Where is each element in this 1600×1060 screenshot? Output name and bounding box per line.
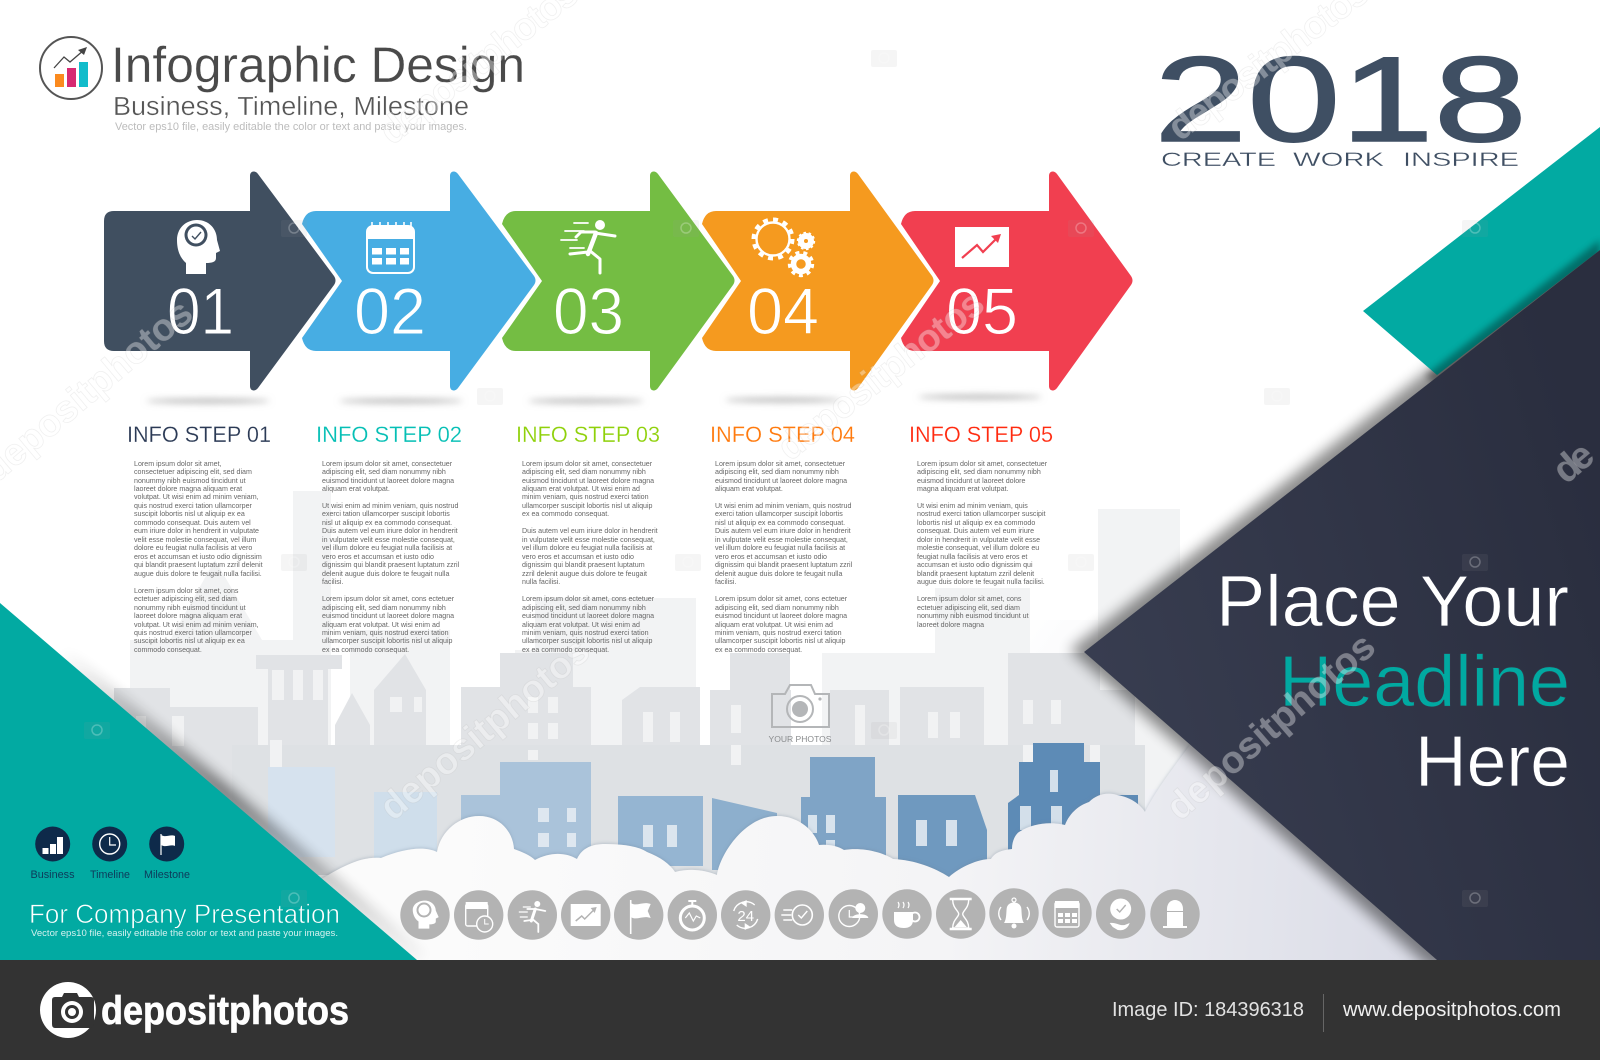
step 4 body text: ex ea commodo consequat. bbox=[715, 646, 802, 654]
step 2 body text: euismod tincidunt ut laoreet dolore magna bbox=[322, 477, 454, 485]
step 2 body text: Duis autem vel eum iriure dolor in hendrerit bbox=[322, 527, 458, 535]
watermarks: depositphotos bbox=[372, 630, 598, 829]
step 3 body text: ex ea commodo consequat. bbox=[522, 510, 609, 518]
step 4 body text: Lorem ipsum dolor sit amet, cons ectetuer bbox=[715, 595, 847, 603]
step 3 body text: Lorem ipsum dolor sit amet, consectetuer bbox=[522, 460, 652, 468]
step 3 body text: ex ea commodo consequat. bbox=[522, 646, 609, 654]
step 4 body text: aliquam erat volutpat. Ut wisi enim ad bbox=[715, 620, 833, 628]
step 2 body text: delenit augue duis dolore te feugait nulla bbox=[322, 570, 449, 578]
step 2 arrow bbox=[302, 172, 536, 390]
step 5 body text: dolor in hendrerit in vulputate velit esse bbox=[917, 536, 1040, 544]
top-right teal band bbox=[1363, 127, 1600, 375]
paper clouds ground bbox=[320, 745, 1440, 960]
title: Infographic Design bbox=[111, 37, 525, 93]
step 4 body text: ullamcorper suscipit lobortis nisl ut aliquip bbox=[715, 637, 846, 645]
step 2 body text: exerci tation ullamcorper suscipit lobortis bbox=[322, 510, 450, 518]
icon: milestone marker bbox=[1150, 889, 1200, 939]
depositphotos logo: depositphotos bbox=[101, 989, 349, 1033]
step 2 body text bbox=[322, 460, 459, 654]
step 3 arrow bbox=[502, 172, 734, 390]
logo icon bbox=[40, 37, 102, 99]
step 5 body text: euismod tincidunt ut laoreet dolore bbox=[917, 477, 1025, 485]
step 4 body text: Ut wisi enim ad minim veniam, quis nostrud bbox=[715, 502, 851, 510]
step 4 body text: vel illum dolore eu feugiat nulla facilisis at bbox=[715, 544, 845, 552]
icon labels: Timeline bbox=[90, 869, 130, 881]
step 4 body text: delenit augue duis dolore te feugait nulla bbox=[715, 570, 842, 578]
step 4 body text: Lorem ipsum dolor sit amet, consectetuer bbox=[715, 460, 845, 468]
icon: bell bbox=[989, 888, 1039, 938]
step 2 body text: aliquam erat volutpat. bbox=[322, 485, 390, 493]
step 3 body text: vero eros et accumsan et iusto odio bbox=[522, 553, 634, 561]
step 5 body text: nonummy nibh euismod tincidunt ut bbox=[917, 612, 1029, 620]
step 3 body text: minim veniam, quis nostrud exerci tation bbox=[522, 629, 649, 637]
icon: chart bbox=[561, 890, 610, 940]
step 3 body text: Duis autem vel eum iriure dolor in hendrerit bbox=[522, 527, 658, 535]
tagline: WORK bbox=[1293, 149, 1384, 171]
step 3 body text: adipiscing elit, sed diam nonummy nibh bbox=[522, 604, 646, 612]
step 4 body text: nisl ut aliquip ex ea commodo consequat. bbox=[715, 519, 845, 527]
icon: coffee cup bbox=[882, 889, 932, 939]
watermarks: depositphotos bbox=[770, 282, 993, 469]
icon: clock person bbox=[829, 889, 878, 939]
step 1 body text: eros et accumsan et iusto odio dignissim bbox=[134, 553, 262, 561]
subtitle: Business, Timeline, Milestone bbox=[113, 93, 469, 121]
icon: runner bbox=[508, 890, 557, 940]
year heading: 2018 bbox=[1154, 31, 1527, 167]
bottom-left teal panel bbox=[0, 603, 417, 960]
step 3 body text: euismod tincidunt ut laoreet dolore magna bbox=[522, 477, 654, 485]
icon: runner bbox=[561, 220, 615, 273]
icon: gears bbox=[754, 220, 814, 276]
tagline: INSPIRE bbox=[1403, 149, 1519, 171]
icon: milestone bbox=[149, 826, 184, 862]
icon: clock in hand bbox=[1096, 889, 1145, 939]
step 5 body text: Lorem ipsum dolor sit amet, consectetuer bbox=[917, 460, 1047, 468]
step 1 body text: quis nostrud exerci tation ullamcorper bbox=[134, 502, 252, 510]
step 4 body text: aliquam erat volutpat. bbox=[715, 485, 783, 493]
icon: stopwatch bbox=[668, 890, 717, 940]
step headings: INFO STEP 05 bbox=[909, 422, 1053, 447]
city windows bbox=[136, 670, 1100, 775]
dark panel shadow bbox=[1070, 236, 1600, 968]
step 2 body text: ex ea commodo consequat. bbox=[322, 646, 409, 654]
step 1 body text: suscipit lobortis nisl ut aliquip ex ea bbox=[134, 637, 245, 645]
step 1 body text: nonummy nibh euismod tincidunt ut bbox=[134, 604, 246, 612]
step 5 body text: Ut wisi enim ad minim veniam, quis bbox=[917, 502, 1028, 510]
step 2 body text: euismod tincidunt ut laoreet dolore magna bbox=[322, 612, 454, 620]
step 2 body text: adipiscing elit, sed diam nonummy nibh bbox=[322, 604, 446, 612]
icon row bbox=[400, 888, 1200, 940]
step 1 body text: Lorem ipsum dolor sit amet, cons bbox=[134, 587, 238, 595]
blue building windows bbox=[538, 770, 1062, 854]
step 5 body text: nostrud exerci tation ullamcorper suscipit bbox=[917, 510, 1046, 518]
city skyline: blue foreground buildings bbox=[268, 743, 1138, 880]
headline: Place Your bbox=[1216, 562, 1569, 642]
step 3 body text: ullamcorper suscipit lobortis nisl ut aliquip bbox=[522, 637, 653, 645]
icon: business bbox=[35, 826, 70, 862]
step 2 body text: dignissim qui blandit praesent luptatum zzril bbox=[322, 561, 459, 569]
step 1 body text: ectetuer adipiscing elit, sed diam bbox=[134, 595, 237, 603]
presentation heading: For Company Presentation bbox=[29, 899, 340, 929]
city skyline: grey building layer bbox=[114, 653, 1145, 875]
presentation note: Vector eps10 file, easily editable the color or text and paste your images. bbox=[31, 928, 338, 939]
faint camera marks bbox=[84, 50, 1488, 907]
step 5 body text: Lorem ipsum dolor sit amet, cons bbox=[917, 595, 1021, 603]
step 3 body text: minim veniam, quis nostrud exerci tation bbox=[522, 493, 649, 501]
step 1 body text: commodo consequat. Duis autem vel bbox=[134, 519, 251, 527]
step 4 body text: vero eros et accumsan et iusto odio bbox=[715, 553, 827, 561]
image id: Image ID: 184396318 bbox=[1112, 999, 1304, 1021]
step 1 body text: volutpat. Ut wisi enim ad minim veniam, bbox=[134, 493, 259, 501]
number 02: 02 bbox=[354, 274, 426, 348]
icon: 24 hours: 24 bbox=[737, 908, 754, 925]
title note: Vector eps10 file, easily editable the color or text and paste your images. bbox=[115, 121, 467, 133]
step 5 body text bbox=[917, 460, 1047, 628]
teal triangle shadow bbox=[0, 593, 427, 960]
step 5 body text: laoreet dolore magna bbox=[917, 620, 984, 628]
step 3 body text: ullamcorper suscipit lobortis nisl ut aliquip bbox=[522, 502, 653, 510]
step 4 body text bbox=[715, 460, 852, 654]
step headings: INFO STEP 01 bbox=[127, 422, 271, 447]
step 2 body text: nisl ut aliquip ex ea commodo consequat. bbox=[322, 519, 452, 527]
watermarks bbox=[0, 0, 1600, 829]
step 2 body text: Ut wisi enim ad minim veniam, quis nostrud bbox=[322, 502, 458, 510]
logo and title block bbox=[40, 37, 525, 133]
step 5 body text: feugiat nulla facilisis at vero eros et bbox=[917, 553, 1027, 561]
icon: head bbox=[400, 890, 450, 940]
icon: calendar bbox=[367, 222, 414, 273]
step 3 body text: adipiscing elit, sed diam nonummy nibh bbox=[522, 468, 646, 476]
icon labels: Business bbox=[30, 869, 75, 881]
icon: calendar bbox=[1042, 888, 1092, 938]
icon: flag bbox=[614, 890, 663, 940]
headline: Here bbox=[1415, 722, 1570, 802]
step 1 body text: nonummy nibh euismod tincidunt ut bbox=[134, 477, 246, 485]
step 1 body text: dolore eu feugiat nulla facilisis at vero bbox=[134, 544, 252, 552]
step 3 body text: euismod tincidunt ut laoreet dolore magna bbox=[522, 612, 654, 620]
step 5 body text: accumsan et iusto odio dignissim qui bbox=[917, 561, 1033, 569]
step 4 body text: Duis autem vel eum iriure dolor in hendrerit bbox=[715, 527, 851, 535]
photo placeholder bbox=[768, 685, 832, 744]
step 4 body text: in vulputate velit esse molestie consequat, bbox=[715, 536, 848, 544]
tagline bbox=[1161, 149, 1519, 171]
icon: head with clock bbox=[177, 220, 220, 274]
step 3 body text: nulla facilisi. bbox=[522, 578, 560, 586]
icon: timeline bbox=[92, 826, 127, 862]
step 2 body text: Lorem ipsum dolor sit amet, cons ectetuer bbox=[322, 595, 454, 603]
step 1 body text: qui blandit praesent luptatum zzril delenit bbox=[134, 561, 263, 569]
step 2 body text: ullamcorper suscipit lobortis nisl ut aliquip bbox=[322, 637, 453, 645]
step 1 body text: quis nostrud exerci tation ullamcorper bbox=[134, 629, 252, 637]
headline: Headline bbox=[1279, 642, 1570, 722]
step 5 arrow bbox=[901, 172, 1132, 390]
step 3 body text: zzril delenit augue duis dolore te feugait bbox=[522, 570, 647, 578]
step 2 body text: minim veniam, quis nostrud exerci tation bbox=[322, 629, 449, 637]
step headings: INFO STEP 04 bbox=[710, 422, 855, 447]
step headings: INFO STEP 03 bbox=[516, 422, 660, 447]
step 5 body text: molestie consequat, vel illum dolore eu bbox=[917, 544, 1039, 552]
step 5 body text: ectetuer adipiscing elit, sed diam bbox=[917, 604, 1020, 612]
step 1 body text: volutpat. Ut wisi enim ad minim veniam, bbox=[134, 620, 259, 628]
step 5 body text: adipiscing elit, sed diam nonummy nibh bbox=[917, 468, 1041, 476]
city skyline: far pale towers bbox=[130, 491, 1180, 793]
step 4 body text: minim veniam, quis nostrud exerci tation bbox=[715, 629, 842, 637]
dark headline panel bbox=[1084, 250, 1600, 960]
step 1 body text: commodo consequat. bbox=[134, 646, 202, 654]
icon: chart panel bbox=[955, 227, 1009, 267]
step 4 body text: euismod tincidunt ut laoreet dolore magna bbox=[715, 612, 847, 620]
step headings bbox=[127, 422, 1053, 447]
step 1 body text: Lorem ipsum dolor sit amet, bbox=[134, 460, 222, 468]
step 1 arrow bbox=[104, 172, 336, 390]
re-shadow over teal band bbox=[1425, 240, 1600, 385]
step 2 body text: Lorem ipsum dolor sit amet, consectetuer bbox=[322, 460, 452, 468]
watermarks: depositphotos bbox=[1158, 625, 1384, 829]
icon: 24 hours bbox=[721, 890, 770, 940]
icon: hourglass bbox=[936, 889, 985, 939]
step 3 body text: Lorem ipsum dolor sit amet, cons ectetuer bbox=[522, 595, 654, 603]
step 2 body text: adipiscing elit, sed diam nonummy nibh bbox=[322, 468, 446, 476]
step 2 body text: vero eros et accumsan et iusto odio bbox=[322, 553, 434, 561]
step 4 body text: facilisi. bbox=[715, 578, 736, 586]
step 1 body text: eum iriure dolor in hendrerit in vulputate bbox=[134, 527, 259, 535]
step 5 body text: consequat. Duis autem vel eum iriure bbox=[917, 527, 1034, 535]
step 5 body text: magna aliquam erat volutpat. bbox=[917, 485, 1008, 493]
step 1 body text: laoreet dolore magna aliquam erat bbox=[134, 485, 242, 493]
tagline: CREATE bbox=[1161, 149, 1276, 171]
number 04: 04 bbox=[747, 274, 819, 348]
headline bbox=[1216, 562, 1570, 802]
step 3 body text: in vulputate velit esse molestie consequat, bbox=[522, 536, 655, 544]
icon: calendar clock bbox=[454, 890, 503, 940]
photo placeholder: YOUR PHOTOS bbox=[768, 734, 832, 744]
step 1 body text: consectetuer adipiscing elit, sed diam bbox=[134, 468, 252, 476]
step 4 body text: adipiscing elit, sed diam nonummy nibh bbox=[715, 604, 839, 612]
step 1 body text: laoreet dolore magna aliquam erat bbox=[134, 612, 242, 620]
step 1 body text: velit esse molestie consequat, vel illum bbox=[134, 536, 256, 544]
step 4 body text: dignissim qui blandit praesent luptatum zzril bbox=[715, 561, 852, 569]
number 03: 03 bbox=[553, 274, 624, 348]
step 4 arrow bbox=[702, 172, 934, 390]
step 4 body text: exerci tation ullamcorper suscipit lobortis bbox=[715, 510, 843, 518]
step 3 body text: dignissim qui blandit praesent luptatum bbox=[522, 561, 645, 569]
step 2 body text: facilisi. bbox=[322, 578, 343, 586]
icon labels: Milestone bbox=[144, 869, 190, 881]
number 01: 01 bbox=[167, 274, 234, 348]
icon labels bbox=[30, 869, 190, 881]
step 1 body text: suscipit lobortis nisl ut aliquip ex ea bbox=[134, 510, 245, 518]
step 5 body text: augue duis dolore te feugait nulla facilisi. bbox=[917, 578, 1045, 586]
depositphotos logo bbox=[40, 982, 349, 1038]
step 5 body text: blandit praesent luptatum zzril delenit bbox=[917, 570, 1034, 578]
step 4 body text: euismod tincidunt ut laoreet dolore magna bbox=[715, 477, 847, 485]
step 2 body text: in vulputate velit esse molestie consequat, bbox=[322, 536, 455, 544]
step 2 body text: aliquam erat volutpat. Ut wisi enim ad bbox=[322, 620, 440, 628]
footer bar bbox=[0, 960, 1600, 1060]
step 5 body text: lobortis nisl ut aliquip ex ea commodo bbox=[917, 519, 1035, 527]
step 3 body text: aliquam erat volutpat. Ut wisi enim ad bbox=[522, 485, 640, 493]
website: www.depositphotos.com bbox=[1342, 999, 1561, 1021]
step 1 body text bbox=[134, 460, 263, 654]
step 4 body text: adipiscing elit, sed diam nonummy nibh bbox=[715, 468, 839, 476]
step 2 body text: vel illum dolore eu feugiat nulla facilisis at bbox=[322, 544, 452, 552]
step 1 body text: augue duis dolore te feugait nulla facilisi. bbox=[134, 570, 262, 578]
step 3 body text bbox=[522, 460, 658, 654]
icon: fast clock bbox=[775, 890, 824, 940]
number 05: 05 bbox=[946, 274, 1018, 348]
step headings: INFO STEP 02 bbox=[316, 422, 462, 447]
step 3 body text: vel illum dolore eu feugiat nulla facilisis at bbox=[522, 544, 652, 552]
arrow floor shadows bbox=[146, 395, 1042, 403]
step 3 body text: aliquam erat volutpat. Ut wisi enim ad bbox=[522, 620, 640, 628]
